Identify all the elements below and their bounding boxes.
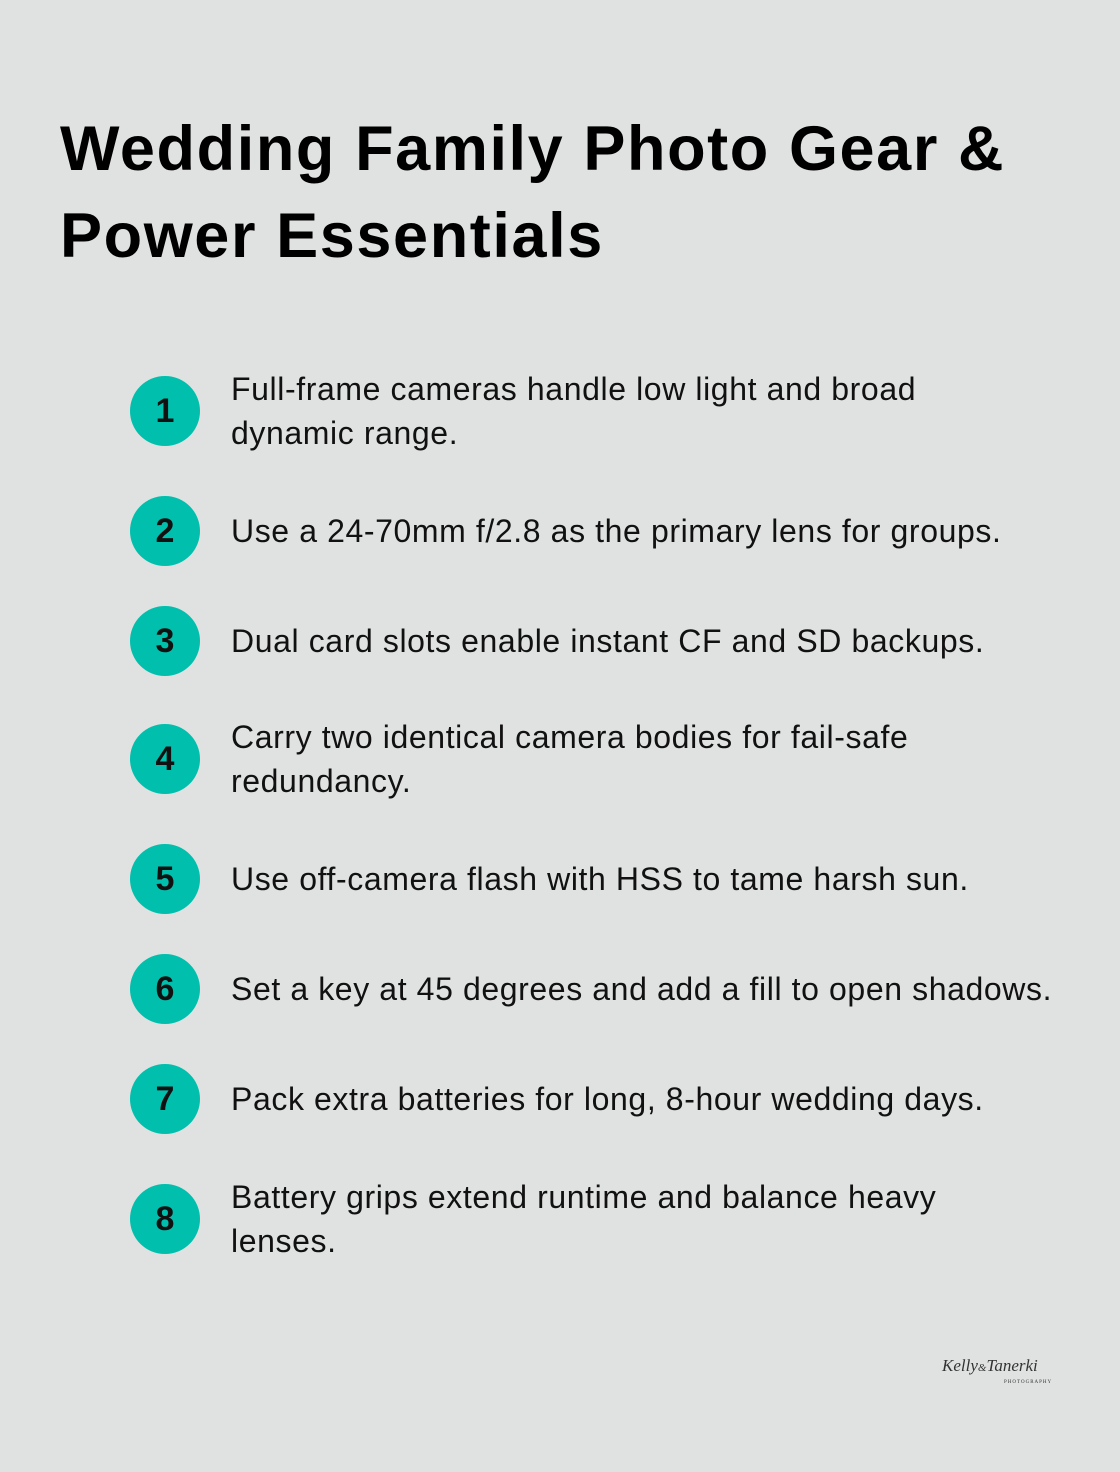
item 8 — [130, 1179, 936, 1259]
item 4: Carry two identical camera bodies for fail-safe — [231, 719, 908, 755]
signature logo — [942, 1356, 1052, 1385]
item 7: 7 — [156, 1080, 174, 1118]
item 1 — [130, 371, 916, 451]
item 4 — [130, 719, 908, 799]
signature logo: PHOTOGRAPHY — [1004, 1380, 1052, 1385]
item 3: Dual card slots enable instant CF and SD backups. — [231, 623, 984, 659]
item 7 — [130, 1064, 984, 1134]
item 3: 3 — [156, 622, 174, 660]
item 5: 5 — [156, 860, 174, 898]
item 8: Battery grips extend runtime and balance heavy — [231, 1179, 936, 1215]
title: Wedding Family Photo Gear & — [60, 114, 1005, 184]
item 4: redundancy. — [231, 763, 411, 799]
item 4: 4 — [156, 740, 174, 778]
item 7: Pack extra batteries for long, 8-hour wedding days. — [231, 1081, 984, 1117]
item 8: 8 — [156, 1200, 174, 1238]
signature logo: Kelly&Tanerki — [942, 1356, 1038, 1375]
item 2 — [130, 496, 1001, 566]
title: Power Essentials — [60, 201, 604, 271]
item 6: 6 — [156, 970, 174, 1008]
item 1: Full-frame cameras handle low light and broad — [231, 371, 916, 407]
title — [60, 114, 1005, 271]
item 6 — [130, 954, 1052, 1024]
item 8: lenses. — [231, 1223, 337, 1259]
item 1: dynamic range. — [231, 415, 458, 451]
item 6: Set a key at 45 degrees and add a fill to open shadows. — [231, 971, 1052, 1007]
item 5: Use off-camera flash with HSS to tame harsh sun. — [231, 861, 969, 897]
item 5 — [130, 844, 969, 914]
item 3 — [130, 606, 984, 676]
item 2: Use a 24-70mm f/2.8 as the primary lens for groups. — [231, 513, 1001, 549]
item 1: 1 — [156, 392, 174, 430]
item 2: 2 — [156, 512, 174, 550]
